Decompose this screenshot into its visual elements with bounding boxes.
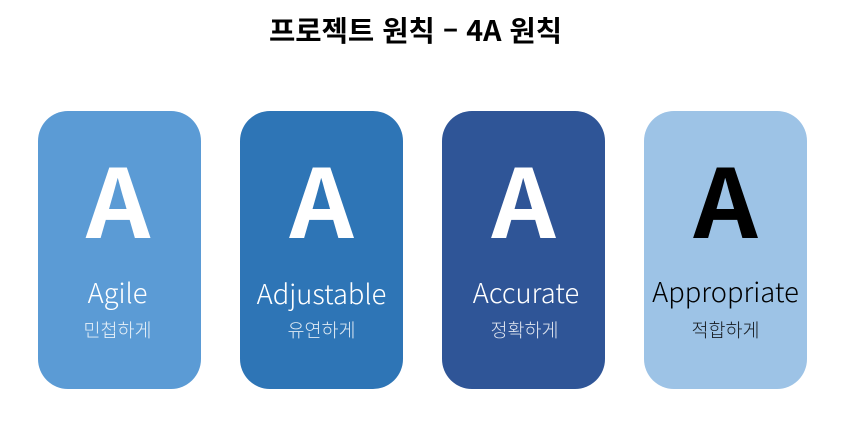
panel: Appropriate: [644, 111, 807, 389]
label: Accurate: Accurate: [473, 271, 579, 311]
letter A: A: [289, 128, 354, 266]
description: 유연하게: 유연하게: [287, 317, 356, 343]
description: 민첩하게: 민첩하게: [83, 317, 152, 343]
label: Appropriate: Appropriate: [652, 270, 799, 310]
panel: Agile: [38, 111, 201, 389]
label: Agile: Agile: [88, 271, 147, 311]
letter A: A: [491, 128, 556, 266]
panel: Accurate: [442, 111, 605, 389]
description: 정확하게: 정확하게: [490, 317, 559, 343]
title: 프로젝트 원칙 – 4A 원칙: [269, 9, 562, 50]
letter A: A: [86, 128, 150, 266]
letter A: A: [693, 128, 758, 266]
panel: Adjustable: [240, 111, 403, 389]
description: 적합하게: 적합하게: [691, 317, 760, 343]
label: Adjustable: Adjustable: [257, 272, 386, 312]
